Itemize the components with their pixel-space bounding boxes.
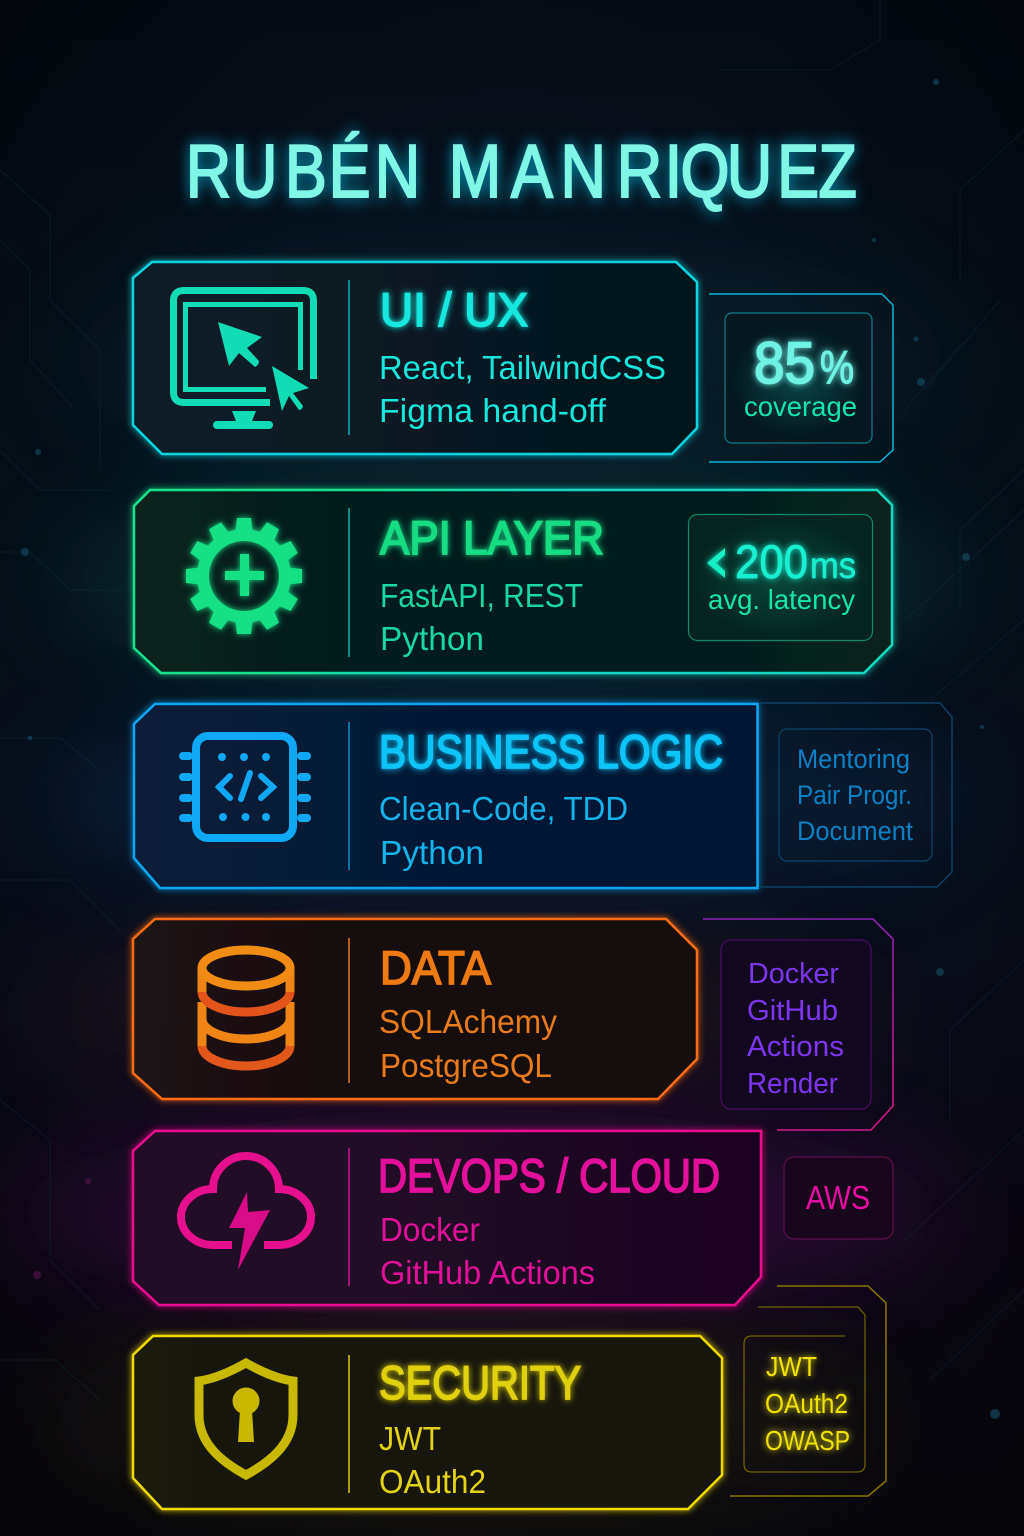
divider [348, 1355, 350, 1493]
heading: API LAYER [380, 511, 604, 564]
soft-skills list: Document [797, 816, 913, 846]
divider [348, 722, 350, 870]
icon: database [202, 950, 290, 1066]
tech list [379, 349, 666, 429]
side panel: coverage: % [820, 341, 854, 393]
side panel: mentoring [760, 703, 952, 887]
inner box [784, 1157, 893, 1239]
heading: DEVOPS / CLOUD [378, 1149, 720, 1202]
tech list: Figma hand-off [379, 392, 607, 429]
card frame [133, 919, 697, 1099]
inner box [721, 940, 871, 1109]
tech list: Python [380, 834, 484, 871]
heading: SECURITY [379, 1356, 581, 1409]
heading: DATA [380, 941, 492, 994]
tech list [379, 1420, 486, 1500]
deployment list: GitHub [747, 995, 838, 1027]
tech list: PostgreSQL [380, 1047, 552, 1084]
tech list: React, TailwindCSS [379, 349, 666, 386]
chevron less-than [707, 548, 725, 578]
side panel: AWS [784, 1157, 893, 1239]
panel: business logic [134, 704, 758, 888]
divider [348, 1148, 350, 1286]
inner box [779, 729, 932, 861]
card frame [133, 1131, 761, 1305]
tech list [379, 790, 628, 871]
side panel: coverage [709, 294, 893, 462]
tech list: JWT [379, 1420, 441, 1457]
metric box: ms [810, 545, 856, 586]
divider [348, 508, 350, 657]
divider [348, 280, 350, 435]
panel: data [133, 919, 697, 1099]
title: RUBÉN MANRIQUEZ [186, 129, 857, 213]
icon: code chip [179, 736, 311, 838]
tech list [380, 577, 583, 657]
side panel: standards [730, 1286, 886, 1496]
tech list: Clean-Code, TDD [379, 790, 628, 827]
AWS label: AWS [806, 1179, 870, 1216]
divider [348, 938, 350, 1083]
card frame [133, 262, 697, 454]
outer bracket [709, 294, 893, 462]
deployment list [747, 958, 844, 1100]
standards list: OWASP [765, 1425, 850, 1456]
heading: UI / UX [380, 283, 528, 336]
metric label: avg. latency [708, 584, 855, 615]
panel: API layer [134, 490, 892, 673]
tech list: Docker [380, 1211, 480, 1248]
panel: UI / UX [133, 262, 697, 454]
tech list: OAuth2 [379, 1463, 486, 1500]
deployment list: Actions [747, 1031, 844, 1063]
tech list [379, 1003, 557, 1084]
tech list: Python [380, 620, 484, 657]
inner box [725, 313, 872, 443]
metric box [688, 514, 872, 640]
panel: security [133, 1336, 722, 1509]
side panel: deployment [703, 919, 893, 1130]
soft-skills list [797, 744, 913, 846]
heading: BUSINESS LOGIC [379, 725, 723, 778]
icon: shield with keyhole [199, 1363, 293, 1475]
standards list [765, 1351, 850, 1456]
soft-skills list: Pair Progr. [797, 780, 912, 810]
icon: monitor with cursors [174, 290, 314, 429]
standards list: JWT [766, 1351, 817, 1382]
card frame [134, 704, 758, 888]
panel: devops / cloud [133, 1131, 761, 1305]
metric 85%: 85 [754, 331, 815, 396]
icon: cloud with lightning [181, 1156, 311, 1270]
card frame [133, 1336, 722, 1509]
tech list: FastAPI, REST [380, 577, 583, 614]
tech list [380, 1211, 595, 1291]
deployment list: Render [747, 1068, 838, 1100]
deployment list: Docker [748, 958, 839, 990]
card frame [134, 490, 892, 673]
outer bracket [703, 919, 893, 1130]
metric label: coverage [744, 391, 857, 422]
soft-skills list: Mentoring [797, 744, 910, 774]
standards list: OAuth2 [765, 1388, 848, 1419]
outer bracket [730, 1286, 886, 1496]
icon: gear with plus [186, 518, 302, 634]
metric 200ms: 200 [735, 535, 808, 588]
inner box [744, 1307, 865, 1472]
tech list: SQLAchemy [379, 1003, 557, 1040]
tech list: GitHub Actions [380, 1254, 595, 1291]
outer bracket [760, 703, 952, 887]
